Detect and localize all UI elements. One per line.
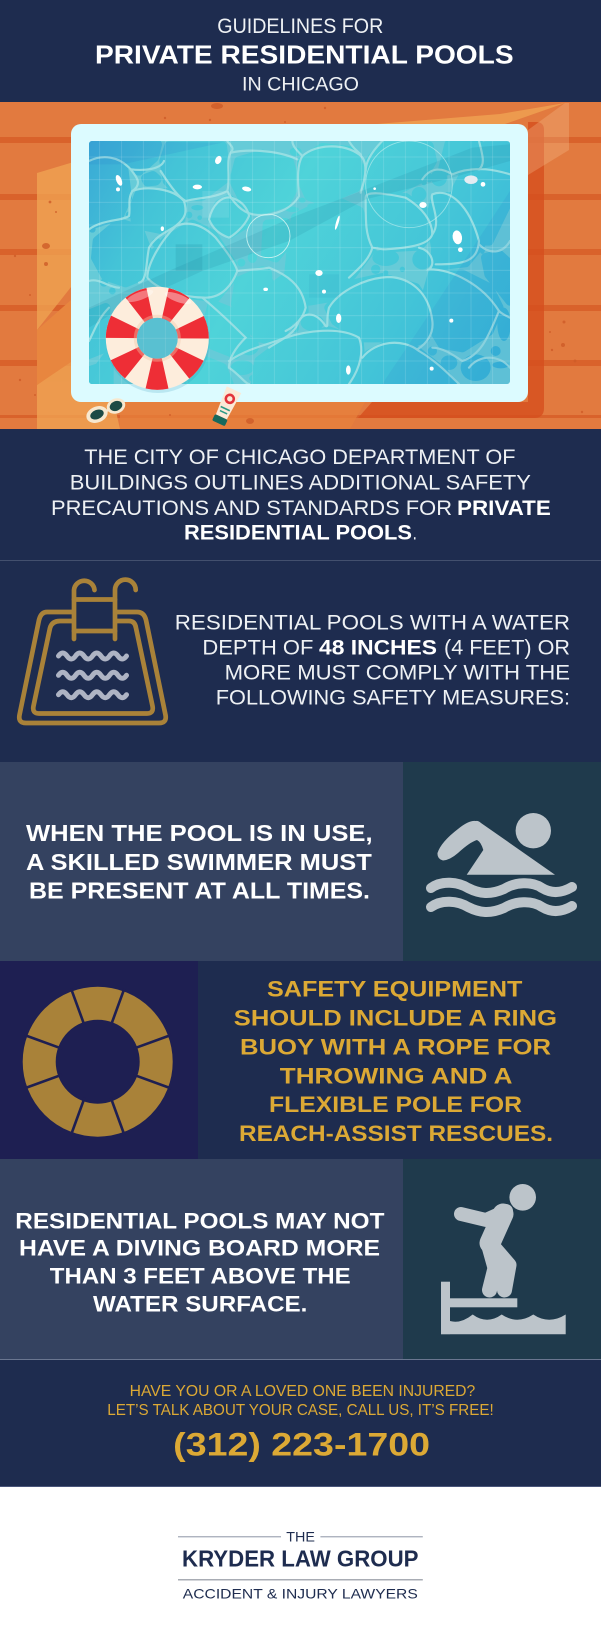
sunglasses — [86, 398, 126, 423]
header band with title — [0, 0, 601, 102]
tile grid — [89, 141, 510, 384]
diving board text: HAVE A DIVING BOARD MORE — [19, 1236, 380, 1261]
intro text: . — [412, 522, 417, 545]
row: safety equipment — [0, 961, 601, 1159]
small caustic cells — [89, 147, 511, 385]
diving board text: WATER SURFACE. — [93, 1292, 307, 1317]
deck speckles — [14, 103, 583, 424]
row: skilled swimmer — [0, 762, 601, 961]
depth text: FOLLOWING SAFETY MEASURES: — [216, 686, 570, 710]
intro text — [51, 446, 551, 545]
water caustic cells — [89, 144, 510, 384]
row: diving board — [0, 1159, 601, 1359]
pool rim — [71, 124, 528, 402]
diving board text: RESIDENTIAL POOLS MAY NOT — [15, 1208, 385, 1233]
depth text: (4 FEET) OR — [444, 636, 570, 660]
phone number: (312) 223-1700 — [173, 1427, 430, 1463]
call to action text: HAVE YOU OR A LOVED ONE BEEN INJURED? — [130, 1383, 475, 1400]
law firm logo: THE — [286, 1529, 315, 1545]
depth text: MORE MUST COMPLY WITH THE — [225, 662, 570, 685]
icon: swimmer — [431, 813, 572, 912]
depth requirement panel — [0, 561, 601, 762]
depth text: 48 INCHES — [319, 636, 437, 660]
sunlit deck patches — [37, 103, 565, 429]
law firm logo: KRYDER LAW GROUP — [182, 1546, 418, 1572]
skilled swimmer text: A SKILLED SWIMMER MUST — [26, 849, 372, 875]
intro text: THE CITY OF CHICAGO DEPARTMENT OF — [84, 446, 516, 469]
depth text: DEPTH OF — [202, 636, 313, 660]
safety equipment text: REACH-ASSIST RESCUES. — [239, 1121, 553, 1146]
pool shadow on deck — [358, 122, 544, 418]
icon: ring buoy — [24, 988, 171, 1135]
intro text: PRECAUTIONS AND STANDARDS FOR — [51, 497, 452, 520]
title line: private residential pools: PRIVATE RESIDENTIAL POOLS — [95, 41, 514, 69]
title line: in Chicago: IN CHICAGO — [242, 74, 359, 96]
safety equipment text: FLEXIBLE POLE FOR — [269, 1092, 522, 1117]
intro text: RESIDENTIAL POOLS — [184, 522, 412, 545]
safety equipment text: THROWING AND A — [280, 1064, 512, 1089]
safety equipment text — [234, 977, 557, 1146]
thin circular ripples — [247, 141, 452, 258]
intro text: BUILDINGS OUTLINES ADDITIONAL SAFETY — [70, 472, 531, 495]
intro text: PRIVATE — [457, 497, 551, 520]
depth text — [175, 611, 570, 710]
depth text: RESIDENTIAL POOLS WITH A WATER — [175, 611, 570, 634]
diving board text — [15, 1208, 385, 1317]
skilled swimmer text — [26, 820, 373, 903]
sunscreen tube — [211, 386, 241, 427]
safety equipment text: SHOULD INCLUDE A RING — [234, 1005, 557, 1030]
deck plank lines — [0, 137, 601, 418]
call to action text: LET’S TALK ABOUT YOUR CASE, CALL US, IT’S FREE! — [107, 1402, 494, 1419]
law firm logo: ACCIDENT & INJURY LAWYERS — [183, 1585, 418, 1601]
pool water — [89, 141, 511, 385]
safety equipment text: SAFETY EQUIPMENT — [267, 977, 523, 1002]
diving board text: THAN 3 FEET ABOVE THE — [50, 1263, 351, 1288]
skilled swimmer text: WHEN THE POOL IS IN USE, — [26, 820, 373, 846]
title line: guidelines for: GUIDELINES FOR — [217, 15, 383, 38]
illustration: pool seen from above on a wooden deck — [0, 102, 601, 429]
law firm logo — [178, 1529, 423, 1601]
intro panel — [0, 429, 601, 561]
skilled swimmer text: BE PRESENT AT ALL TIMES. — [29, 877, 370, 903]
sun glints — [114, 155, 485, 375]
call to action panel — [0, 1359, 601, 1487]
water shadow bands — [89, 144, 510, 328]
life ring — [106, 287, 210, 393]
icon: diver on board — [441, 1184, 566, 1334]
icon: pool with ladder — [19, 580, 166, 723]
call to action text — [107, 1383, 494, 1419]
water caustic veins — [89, 141, 510, 384]
safety equipment text: BUOY WITH A ROPE FOR — [240, 1035, 551, 1060]
